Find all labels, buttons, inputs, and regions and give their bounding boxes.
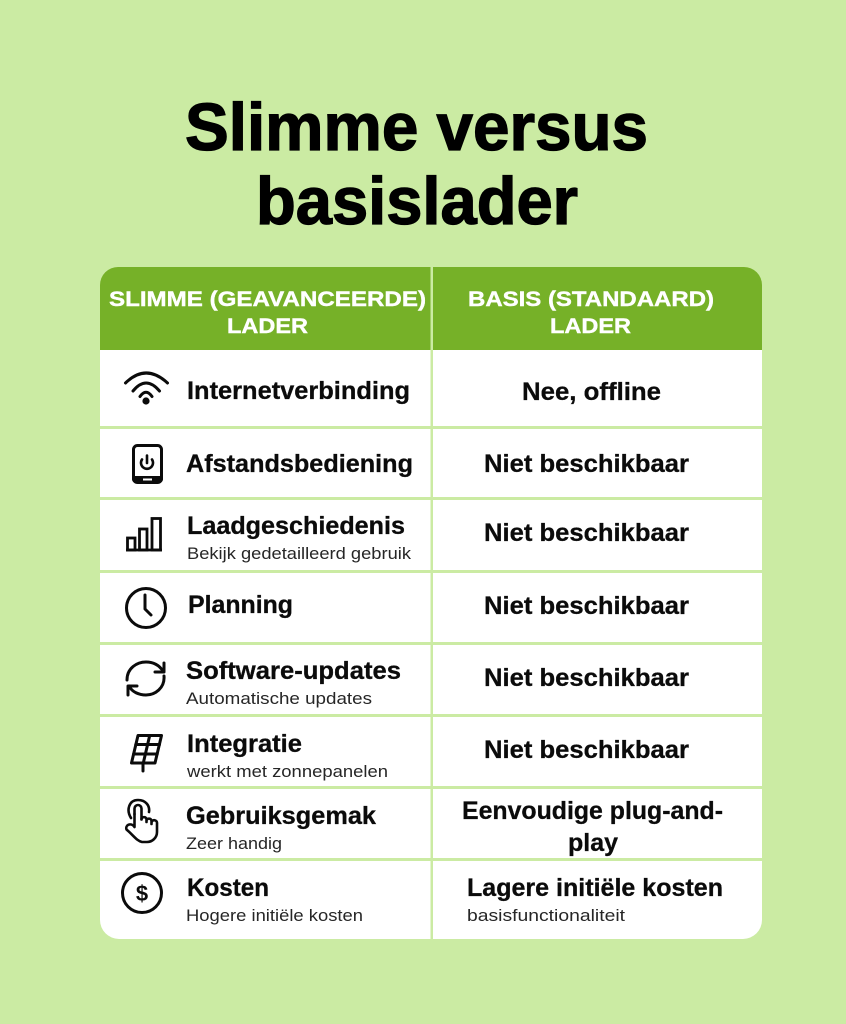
header: basis lader xyxy=(468,288,714,338)
value: niet beschikbaar: Niet beschikbaar xyxy=(484,664,689,692)
label: gebruiksgemak xyxy=(186,802,376,853)
icon: tablet with power symbol xyxy=(132,446,163,483)
label: afstandsbediening: Afstandsbediening xyxy=(186,450,413,478)
label: internetverbinding: Internetverbinding xyxy=(187,377,410,405)
icon: solar panel xyxy=(132,736,162,771)
label: gebruiksgemak: Zeer handig xyxy=(186,835,282,853)
label: software-updates xyxy=(186,657,401,708)
label: integratie: werkt met zonnepanelen xyxy=(186,763,388,781)
icon: wifi xyxy=(126,373,168,405)
title: Slimme versus xyxy=(185,90,648,165)
value: niet beschikbaar: Niet beschikbaar xyxy=(484,736,689,764)
label: planning: Planning xyxy=(188,591,293,619)
value: eenvoudige plug-and-play: Eenvoudige plug-and- xyxy=(462,797,723,825)
icon: dollar coin xyxy=(122,874,162,912)
icon: refresh arrows xyxy=(127,662,164,695)
label: integratie: Integratie xyxy=(187,730,302,758)
label: laadgeschiedenis: Bekijk gedetailleerd gebruik xyxy=(187,545,412,563)
icon: dollar coin: $ xyxy=(136,881,148,906)
value: eenvoudige plug-and-play xyxy=(462,797,723,857)
title: basislader xyxy=(256,164,578,239)
value: lagere initiële kosten: basisfunctionaliteit xyxy=(467,907,625,925)
value: niet beschikbaar: Niet beschikbaar xyxy=(484,592,689,620)
value: niet beschikbaar: Niet beschikbaar xyxy=(484,450,689,478)
icon: clock xyxy=(126,588,166,628)
icon: bar chart xyxy=(126,518,162,550)
label: kosten xyxy=(186,874,363,925)
label: software-updates: Automatische updates xyxy=(186,690,372,708)
label: laadgeschiedenis: Laadgeschiedenis xyxy=(187,512,405,540)
value: eenvoudige plug-and-play: play xyxy=(568,829,618,857)
label: kosten: Kosten xyxy=(187,874,269,902)
header: slimme lader: SLIMME (GEAVANCEERDE) xyxy=(109,288,426,311)
label: software-updates: Software-updates xyxy=(186,657,401,685)
header: slimme lader: LADER xyxy=(227,315,308,338)
comparison table xyxy=(100,267,762,939)
value: lagere initiële kosten: Lagere initiële kosten xyxy=(467,874,723,902)
header: basis lader: BASIS (STANDAARD) xyxy=(468,288,714,311)
value: lagere initiële kosten xyxy=(467,874,723,925)
header: basis lader: LADER xyxy=(550,315,631,338)
icon: tapping hand xyxy=(126,800,157,842)
header: slimme lader xyxy=(109,288,426,338)
label: kosten: Hogere initiële kosten xyxy=(186,907,363,925)
label: integratie xyxy=(186,730,388,781)
label: laadgeschiedenis xyxy=(187,512,412,563)
value: niet beschikbaar: Niet beschikbaar xyxy=(484,519,689,547)
title xyxy=(185,90,648,239)
value: nee, offline: Nee, offline xyxy=(522,378,661,406)
label: gebruiksgemak: Gebruiksgemak xyxy=(186,802,376,830)
